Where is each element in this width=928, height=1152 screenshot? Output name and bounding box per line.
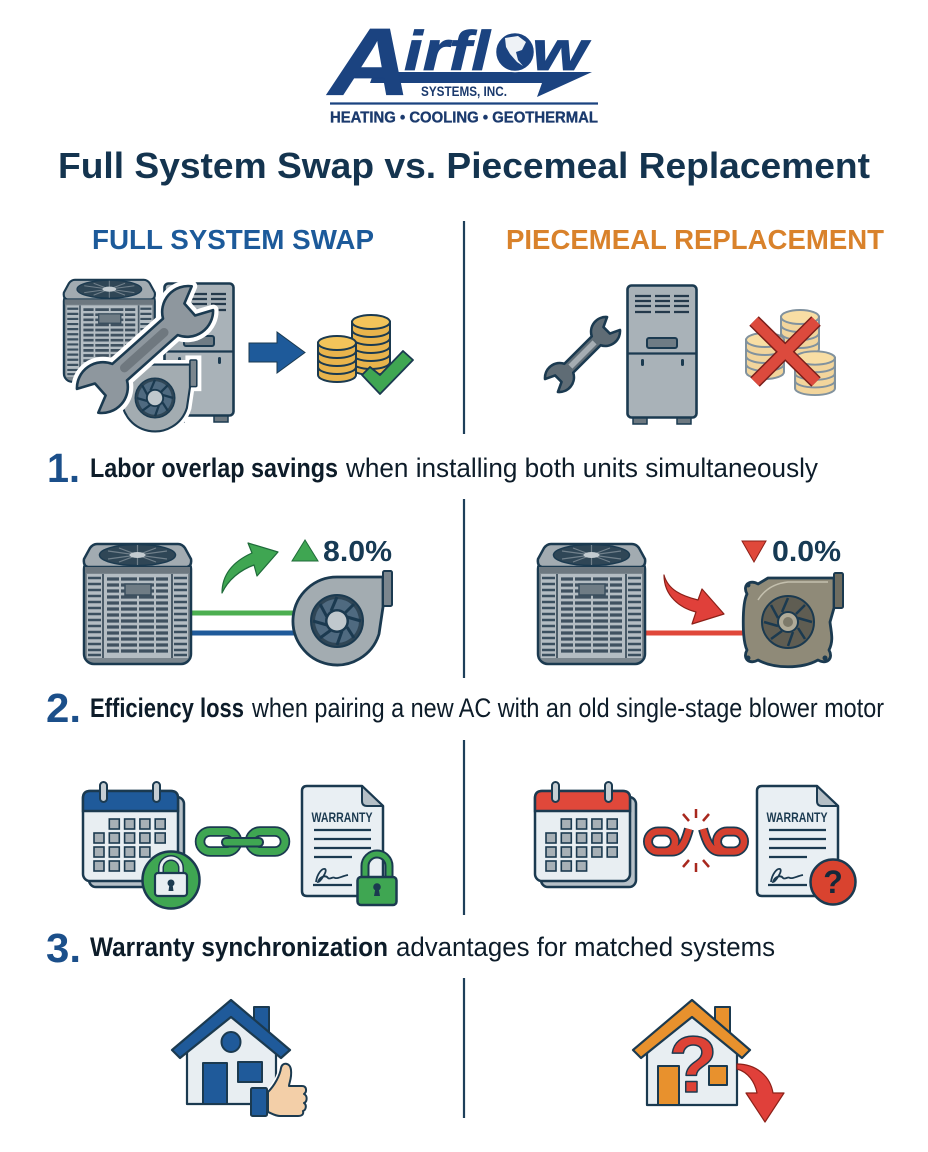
item 2 bold text: Efficiency loss — [90, 693, 244, 723]
padlock — [358, 854, 396, 905]
logo: Airflow Systems — [327, 9, 598, 126]
red question mark: ? — [669, 1020, 717, 1109]
red cross — [754, 321, 816, 382]
value decline arrow — [737, 1064, 784, 1122]
icon: blower — [293, 571, 392, 665]
large wrench — [71, 279, 219, 420]
icon: warranty document with question — [757, 786, 856, 904]
furnace — [164, 284, 234, 422]
logo wordmark: A — [327, 9, 411, 116]
metric: 0.0 percent down — [742, 536, 841, 568]
outdoor AC unit — [64, 280, 155, 382]
logo wordmark — [327, 9, 591, 116]
warranty label: WARRANTY — [766, 810, 828, 825]
warranty label: WARRANTY — [312, 810, 372, 825]
item 3 regular text: advantages for matched systems — [396, 932, 775, 962]
icon: old blower — [743, 573, 843, 667]
item 3 bold text: Warranty synchronization — [90, 932, 388, 962]
blower with white halo — [122, 360, 197, 431]
icon: calendar with lock — [83, 782, 200, 908]
calendar extra date cell — [607, 847, 617, 857]
logo globe — [496, 32, 534, 72]
icon: AC unit — [538, 544, 645, 664]
column heading: full system swap: FULL SYSTEM SWAP — [92, 224, 374, 255]
metric: 8.0 percent up — [292, 536, 392, 568]
logo wordmark: o — [500, 25, 528, 81]
thumbs up hand — [251, 1064, 307, 1116]
logo wordmark: w — [532, 19, 591, 82]
check mark — [362, 351, 413, 394]
arrow: efficiency up — [222, 543, 278, 593]
icon: warranty document with lock — [302, 786, 396, 905]
number 3: 3. — [46, 925, 81, 971]
metric: 8.0 percent up: 8.0% — [323, 536, 392, 568]
icon: house with question and down arrow — [633, 1000, 784, 1122]
icon: crossed out coin stacks — [746, 310, 835, 395]
icon: coin stacks with check — [318, 315, 413, 394]
arrow: leads to savings — [249, 332, 305, 373]
logo tagline: HEATING • COOLING • GEOTHERMAL — [330, 110, 598, 126]
icon: furnace — [628, 286, 696, 424]
logo subtitle: SYSTEMS, INC. — [421, 84, 507, 99]
connection: mismatched line — [644, 630, 746, 636]
connection: matched lines — [190, 613, 296, 633]
lock badge — [142, 852, 200, 908]
break sparks — [683, 809, 709, 872]
title: Full System Swap vs. Piecemeal Replacement — [58, 145, 870, 186]
logo wordmark: irfl — [404, 19, 492, 82]
icon: full system equipment with wrench — [64, 279, 234, 431]
metric: 0.0 percent down: 0.0% — [772, 536, 841, 568]
question badge: ? — [823, 864, 843, 900]
item 2 — [46, 685, 884, 731]
item 1 bold text: Labor overlap savings — [90, 453, 338, 483]
logo swoosh — [370, 72, 592, 97]
column heading: piecemeal replacement: PIECEMEAL REPLACEMENT — [506, 224, 884, 255]
icon: calendar red — [535, 782, 636, 887]
item 1 — [47, 445, 819, 491]
item 3 — [46, 925, 775, 971]
icon: broken red chain — [648, 809, 744, 872]
icon: small wrench — [541, 313, 624, 396]
icon: intact green chain — [200, 832, 285, 852]
icon: AC unit — [84, 544, 191, 664]
icon: house with thumbs up — [172, 1000, 307, 1116]
number 1: 1. — [47, 445, 80, 491]
item 1 regular text: when installing both units simultaneously — [345, 453, 819, 483]
arrow: efficiency down — [664, 575, 724, 624]
number 2: 2. — [46, 685, 81, 731]
